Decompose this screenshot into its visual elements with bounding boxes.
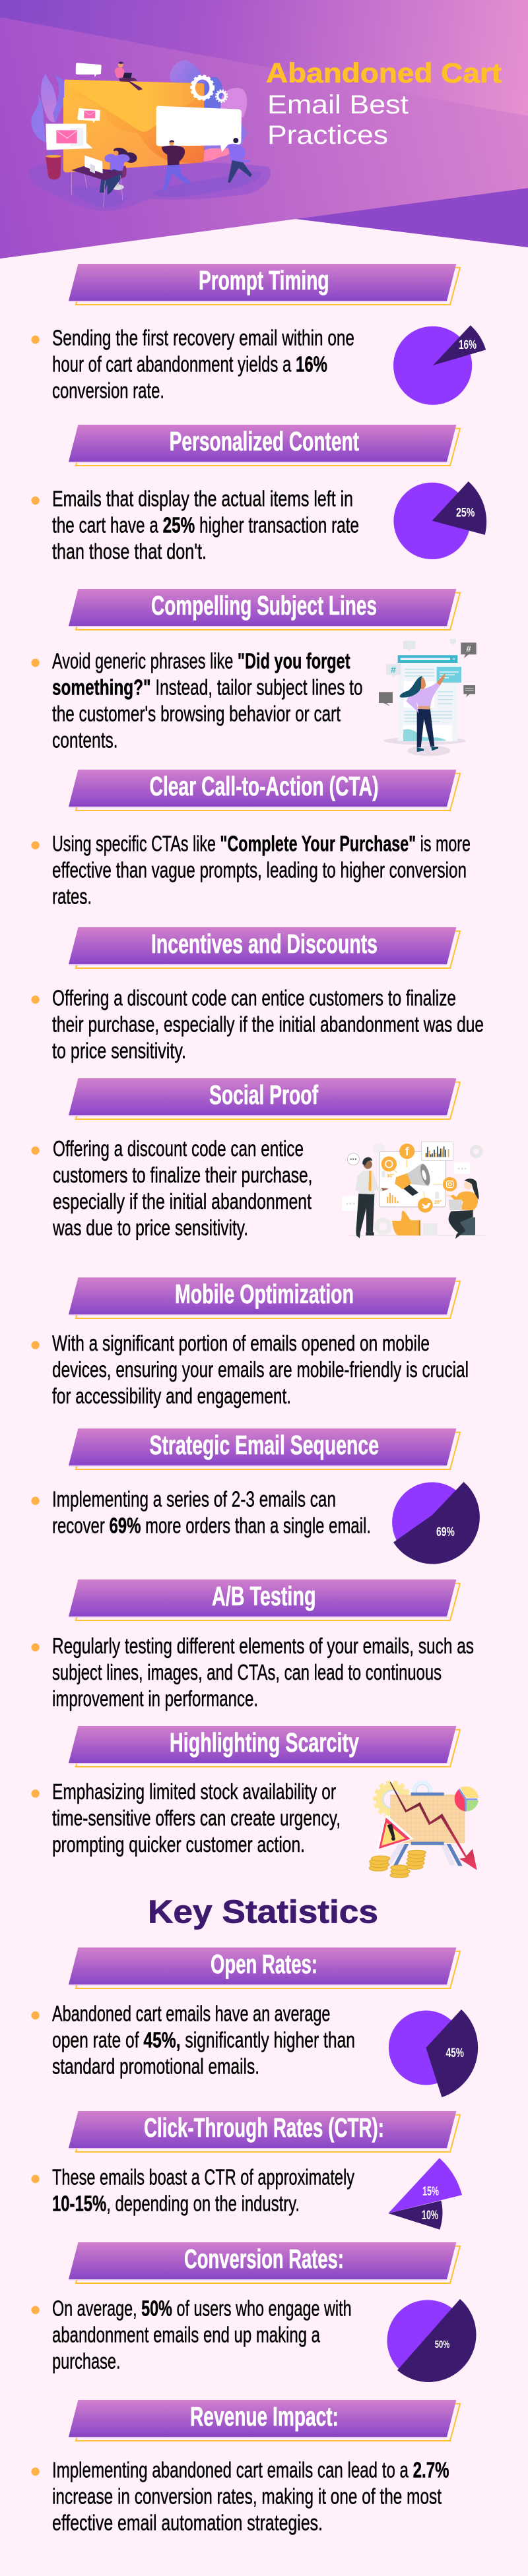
illustration: falling chart with warning sign and coins xyxy=(369,1782,478,1878)
title: Email Best xyxy=(267,90,409,119)
heading: compelling subject lines: Compelling Subject Lines xyxy=(151,590,377,621)
text block: Emphasizing limited stock availability or xyxy=(52,1779,336,1804)
panel: highlighting scarcity xyxy=(31,1726,478,1878)
illustration: social media marketing team: f xyxy=(405,1145,409,1158)
text block xyxy=(52,326,354,403)
text block xyxy=(52,649,363,752)
bullet xyxy=(31,336,40,344)
icon: pie chart xyxy=(455,1787,478,1812)
panel: prompt timing xyxy=(31,264,486,405)
text block: the customer's browsing behavior or cart xyxy=(52,702,341,726)
text block: effective email automation strategies. xyxy=(52,2511,323,2535)
panel: revenue impact xyxy=(31,2400,460,2535)
text block: Using specific CTAs like "Complete Your Purchase" is more xyxy=(52,832,471,856)
text block: standard promotional emails. xyxy=(52,2054,259,2079)
pie chart: 16%: 16% xyxy=(459,338,477,352)
icon: thumbs up xyxy=(392,1211,420,1235)
text block: open rate of 45%, significantly higher than xyxy=(52,2028,355,2052)
heading: strategic email sequence xyxy=(69,1428,460,1469)
text block: conversion rate. xyxy=(52,379,164,403)
bullet xyxy=(31,1643,40,1651)
panel: mobile optimization xyxy=(31,1277,469,1408)
icon: falling arrow xyxy=(390,1782,477,1870)
illustration: social media marketing team xyxy=(342,1142,485,1239)
bullet xyxy=(31,842,40,849)
heading: a/b testing xyxy=(69,1579,460,1620)
text block: These emails boast a CTR of approximately xyxy=(52,2165,354,2190)
heading: a/b testing: A/B Testing xyxy=(212,1581,315,1611)
pie chart: 16% xyxy=(393,325,486,405)
heading: prompt timing: Prompt Timing xyxy=(199,265,329,295)
panel: incentives and discounts xyxy=(31,927,484,1062)
bullet xyxy=(31,2175,40,2183)
text block: purchase. xyxy=(52,2349,121,2374)
panel: compelling subject lines xyxy=(31,589,477,756)
bullet xyxy=(31,1146,40,1155)
heading: highlighting scarcity: Highlighting Scarcity xyxy=(170,1727,359,1758)
header lower right dark wedge xyxy=(296,188,528,247)
pie chart: 15% and 10%: 15% xyxy=(422,2185,439,2199)
figure: woman with laptop xyxy=(444,1179,478,1239)
text block xyxy=(52,1136,313,1240)
heading: open rates xyxy=(69,1947,460,1988)
pie chart: 15% and 10%: 10% xyxy=(422,2209,438,2223)
heading: highlighting scarcity xyxy=(69,1726,460,1767)
text block: On average, 50% of users who engage with xyxy=(52,2296,352,2321)
heading: conversion rates: Conversion Rates: xyxy=(184,2244,344,2274)
section title: key statistics: Key Statistics xyxy=(148,1895,378,1930)
text block: hour of cart abandonment yields a 16% xyxy=(52,352,327,377)
figure: presenter man xyxy=(347,1153,389,1239)
title: Abandoned Cart xyxy=(266,57,502,88)
heading: prompt timing xyxy=(69,264,460,305)
illustration figure: man holding speech bubble xyxy=(162,140,190,191)
heading: incentives and discounts: Incentives and Discounts xyxy=(151,929,378,959)
heading: open rates: Open Rates: xyxy=(211,1949,317,1979)
text block: rates. xyxy=(52,884,92,909)
text block xyxy=(52,1779,341,1856)
heading: personalized content xyxy=(69,425,460,466)
bullet xyxy=(31,996,40,1004)
text block xyxy=(52,2296,352,2374)
pie chart: 25%: 25% xyxy=(456,506,475,520)
panel: a/b testing xyxy=(31,1579,474,1711)
text block: something?" Instead, tailor subject lines to xyxy=(52,675,363,700)
text block: abandonment emails end up making a xyxy=(52,2323,320,2347)
heading: personalized content: Personalized Content xyxy=(170,426,359,456)
panel: personalized content xyxy=(31,425,486,563)
pie chart: 45%: 45% xyxy=(446,2046,464,2060)
illustration figure: seated person with laptop xyxy=(115,61,143,90)
text block: for accessibility and engagement. xyxy=(52,1384,291,1408)
header illustration: team around envelope xyxy=(29,60,271,211)
text block xyxy=(52,487,359,563)
heading: revenue impact xyxy=(69,2400,460,2441)
bullet xyxy=(31,2306,40,2314)
text block xyxy=(52,2165,354,2216)
text block: Offering a discount code can entice xyxy=(53,1136,304,1161)
text block xyxy=(52,1634,474,1711)
header top gradient band xyxy=(0,0,528,259)
text block: Implementing abandoned cart emails can lead to a 2.7% xyxy=(52,2458,449,2482)
heading: incentives and discounts xyxy=(69,927,460,968)
text block: recover 69% more orders than a single email. xyxy=(52,1514,371,1538)
bullet xyxy=(31,2011,40,2019)
title xyxy=(266,57,502,150)
heading: click-through rates xyxy=(69,2111,460,2152)
illustration: woman reading a web page: # xyxy=(466,644,471,654)
heading: clear call-to-action xyxy=(69,770,460,811)
text block: time-sensitive offers can create urgency, xyxy=(52,1806,341,1830)
heading: clear call-to-action: Clear Call-to-Action (CTA) xyxy=(149,771,379,801)
icon: coin stacks xyxy=(369,1850,426,1878)
text block xyxy=(52,985,484,1062)
text block: customers to finalize their purchase, xyxy=(53,1163,313,1187)
text block: was due to price sensitivity. xyxy=(52,1215,248,1240)
icon: warning sign xyxy=(376,1814,414,1851)
bullet xyxy=(31,2468,40,2476)
panel: click-through rates xyxy=(31,2111,462,2230)
heading: mobile optimization xyxy=(69,1277,460,1318)
pie chart: 25% xyxy=(393,481,486,559)
heading: revenue impact: Revenue Impact: xyxy=(190,2401,339,2432)
pie chart: 15% and 10% xyxy=(388,2158,462,2230)
text block: Avoid generic phrases like "Did you forget xyxy=(52,649,350,673)
illustration figure: person running xyxy=(228,138,252,183)
heading: compelling subject lines xyxy=(69,589,460,630)
panel: strategic email sequence xyxy=(31,1428,480,1564)
text block xyxy=(52,832,471,909)
text block: Implementing a series of 2-3 emails can xyxy=(52,1487,336,1512)
text block: Sending the first recovery email within one xyxy=(52,326,354,350)
text block xyxy=(52,1487,371,1538)
panel: social proof xyxy=(31,1078,485,1240)
text block: than those that don't. xyxy=(52,539,207,563)
heading: social proof xyxy=(69,1078,460,1119)
bullet xyxy=(31,1789,40,1798)
pie chart: 69%: 69% xyxy=(436,1525,455,1539)
pie chart: 50%: 50% xyxy=(435,2339,449,2350)
panel: clear call-to-action xyxy=(31,770,471,909)
text block xyxy=(52,2458,449,2535)
text block: especially if the initial abandonment xyxy=(53,1189,312,1213)
heading: strategic email sequence: Strategic Email Sequence xyxy=(149,1430,379,1460)
illustration: social media marketing team: 10° xyxy=(387,1173,394,1179)
heading: mobile optimization: Mobile Optimization xyxy=(175,1279,354,1309)
text block: Abandoned cart emails have an average xyxy=(52,2002,331,2026)
text block xyxy=(52,2002,355,2079)
text block: 10-15%, depending on the industry. xyxy=(52,2192,300,2216)
bullet xyxy=(31,1341,40,1349)
illustration figure: woman at desk xyxy=(71,148,137,208)
text block: improvement in performance. xyxy=(52,1686,258,1711)
illustration: social media marketing team: 20° xyxy=(434,1199,442,1205)
title: Practices xyxy=(267,121,388,150)
pie chart: 45% xyxy=(389,2009,478,2097)
bullet xyxy=(31,497,40,505)
heading: conversion rates xyxy=(69,2242,460,2283)
text block: prompting quicker customer action. xyxy=(52,1832,305,1856)
header middle panel xyxy=(0,17,528,259)
pie chart: 69% xyxy=(392,1482,480,1564)
text block: the cart have a 25% higher transaction rate xyxy=(52,513,359,537)
text block xyxy=(52,1331,469,1408)
panel: conversion rates xyxy=(31,2242,476,2382)
text block: to price sensitivity. xyxy=(52,1038,186,1062)
illustration: woman reading a web page xyxy=(379,639,477,756)
text block: contents. xyxy=(52,728,118,752)
icon: megaphone xyxy=(395,1163,432,1196)
heading: social proof: Social Proof xyxy=(209,1080,318,1110)
header banner xyxy=(0,0,528,259)
illustration: woman reading a web page: # xyxy=(391,665,396,676)
heading: click-through rates: Click-Through Rates (CTR): xyxy=(144,2112,384,2143)
figure: woman xyxy=(400,673,446,752)
pie chart: 50% xyxy=(387,2299,476,2382)
text block: Emails that display the actual items left in xyxy=(52,487,353,510)
bullet xyxy=(31,659,40,667)
panel: open rates xyxy=(31,1947,478,2097)
bullet xyxy=(31,1497,40,1505)
